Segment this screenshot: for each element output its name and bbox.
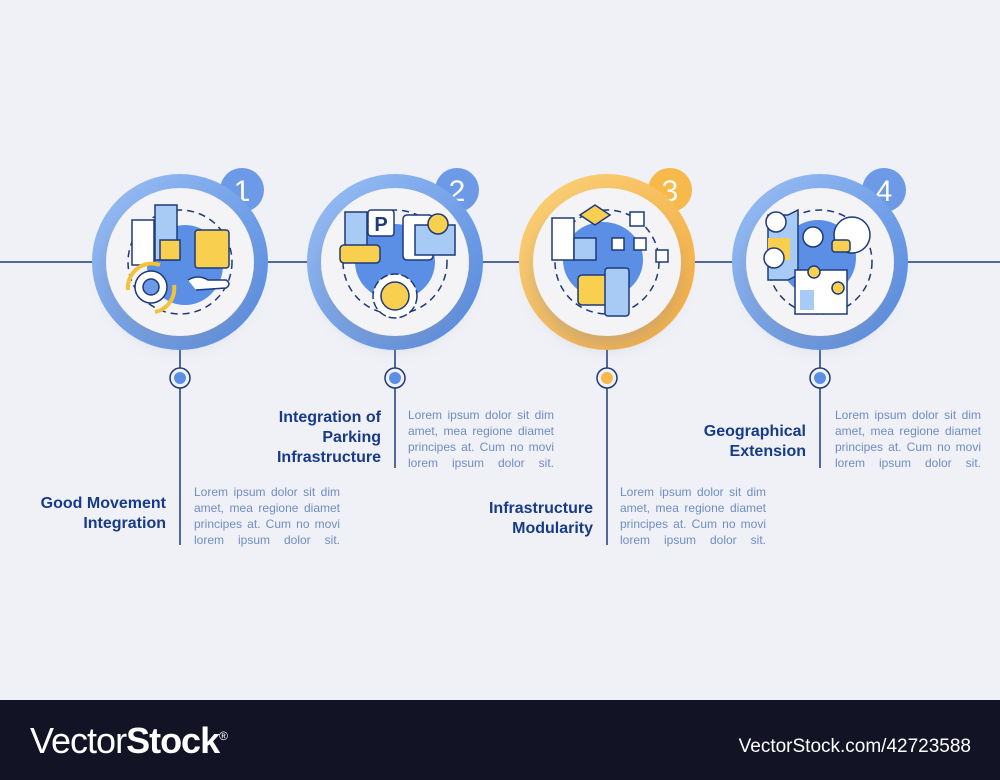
- markers: [170, 368, 830, 388]
- title 2: Infrastructure: [277, 449, 381, 466]
- title 2: [277, 409, 381, 466]
- step 1 circle: [92, 168, 268, 350]
- title 2: Parking: [322, 429, 381, 446]
- step 4 circle: 4: [876, 175, 892, 208]
- step 2 circle: 2: [449, 175, 465, 208]
- title 3: Infrastructure: [489, 500, 593, 517]
- text 3: Lorem ipsum dolor sit dim amet, mea regione diamet principes at. Cum no movi lorem ipsum dolor sit.: [620, 485, 766, 547]
- title 4: [704, 423, 806, 460]
- step 1 circle: 1: [234, 175, 250, 208]
- text 2: Lorem ipsum dolor sit dim amet, mea regione diamet principes at. Cum no movi lorem ipsum dolor sit.: [408, 408, 554, 470]
- step 3 circle: 3: [662, 175, 678, 208]
- logo: VectorStock®: [30, 720, 227, 761]
- step 2 circle: [307, 168, 483, 350]
- title 3: Modularity: [512, 520, 593, 537]
- step 3 circle: [519, 168, 695, 350]
- url: VectorStock.com/42723588: [739, 736, 971, 757]
- text 4: Lorem ipsum dolor sit dim amet, mea regione diamet principes at. Cum no movi lorem ipsum dolor sit.: [835, 408, 981, 470]
- step 2 circle: P: [374, 214, 388, 236]
- title 1: [41, 495, 166, 532]
- title 1: Good Movement: [41, 495, 166, 512]
- footer: [0, 700, 1000, 780]
- step 4 circle: [732, 168, 908, 350]
- text 1: Lorem ipsum dolor sit dim amet, mea regione diamet principes at. Cum no movi lorem ipsum dolor sit.: [194, 485, 340, 547]
- title 3: [489, 500, 593, 537]
- title 2: Integration of: [279, 409, 381, 426]
- title 1: Integration: [83, 515, 166, 532]
- title 4: Extension: [730, 443, 806, 460]
- title 4: Geographical: [704, 423, 806, 440]
